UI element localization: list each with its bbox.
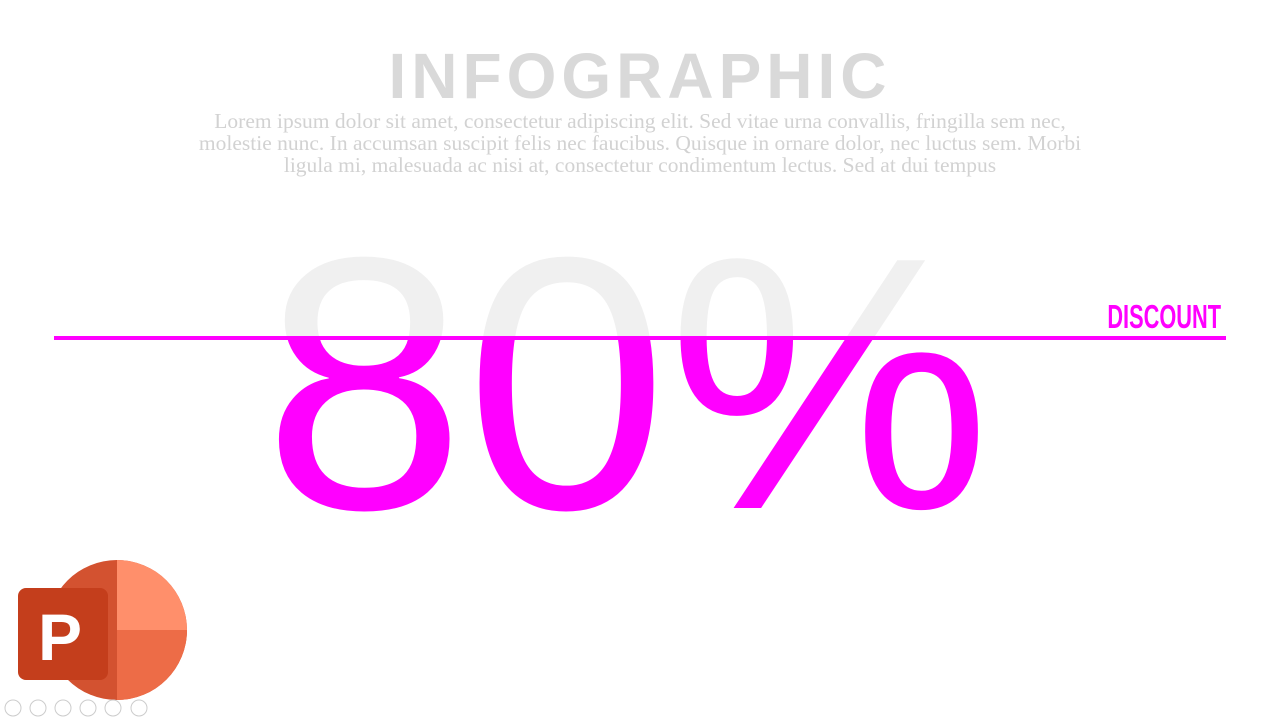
text block: description: Lorem ipsum dolor sit amet, consectetur adipiscing elit. Sed vitae urna convallis, fringilla sem nec,: [214, 109, 1066, 133]
divider line: [54, 336, 1226, 340]
icon: PowerPoint logo: [18, 560, 187, 700]
text block: description: molestie nunc. In accumsan suscipit felis nec faucibus. Quisque in ornare dolor, nec luctus sem. Morbi: [199, 131, 1081, 155]
big number: 80%: [278, 256, 978, 512]
title: INFOGRAPHIC: [388, 40, 892, 112]
big number chart: 80%: [4, 256, 1226, 716]
toolbar icons: [5, 700, 147, 716]
big number: 80%: 80%: [263, 182, 991, 585]
text block: description: ligula mi, malesuada ac nisi at, consectetur condimentum lectus. Sed at dui tempus: [284, 153, 996, 177]
text block: description: [199, 109, 1081, 177]
big number: 80%: 80%: [263, 182, 991, 585]
icon: PowerPoint logo: P: [38, 600, 82, 674]
label: DISCOUNT: DISCOUNT: [1107, 298, 1221, 335]
